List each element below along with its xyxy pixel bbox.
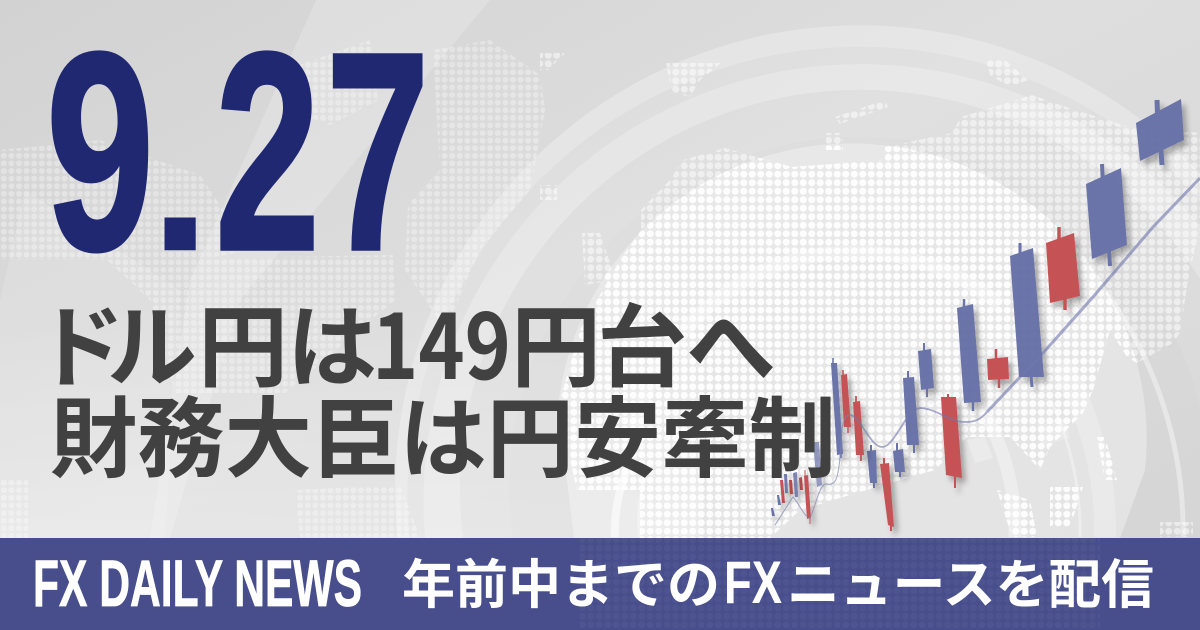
date title [46,0,430,310]
date title: 9 [46,0,154,310]
date title: 2 [215,0,320,309]
blue candles [831,99,1184,488]
band tagline: 年前中までの [402,556,720,615]
trend line [775,178,1200,525]
world map dots: east [540,53,1200,537]
band tagline [402,549,1154,616]
band tagline: FX [724,549,782,616]
candlestick chart [771,99,1200,531]
band label: FX DAILY NEWS: FX DAILY NEWS [33,546,362,620]
footer band [0,538,1200,630]
headline line 2: 財務大臣は円安牽制 [50,390,836,489]
headline line 1: 149 [372,275,511,405]
date title: . [152,66,208,293]
headline line 1 [35,275,776,405]
red candles [780,227,1080,531]
world map dots: west [1,40,545,534]
headline [35,275,836,489]
headline line 1: 円台へ [511,299,776,399]
date title: 7 [326,0,430,309]
band tagline: ニュースを配信 [787,556,1154,615]
headline line 1: ドル円は [35,299,377,399]
small faded blue candles [771,442,822,516]
world map dots: globe highlight [562,146,1136,538]
